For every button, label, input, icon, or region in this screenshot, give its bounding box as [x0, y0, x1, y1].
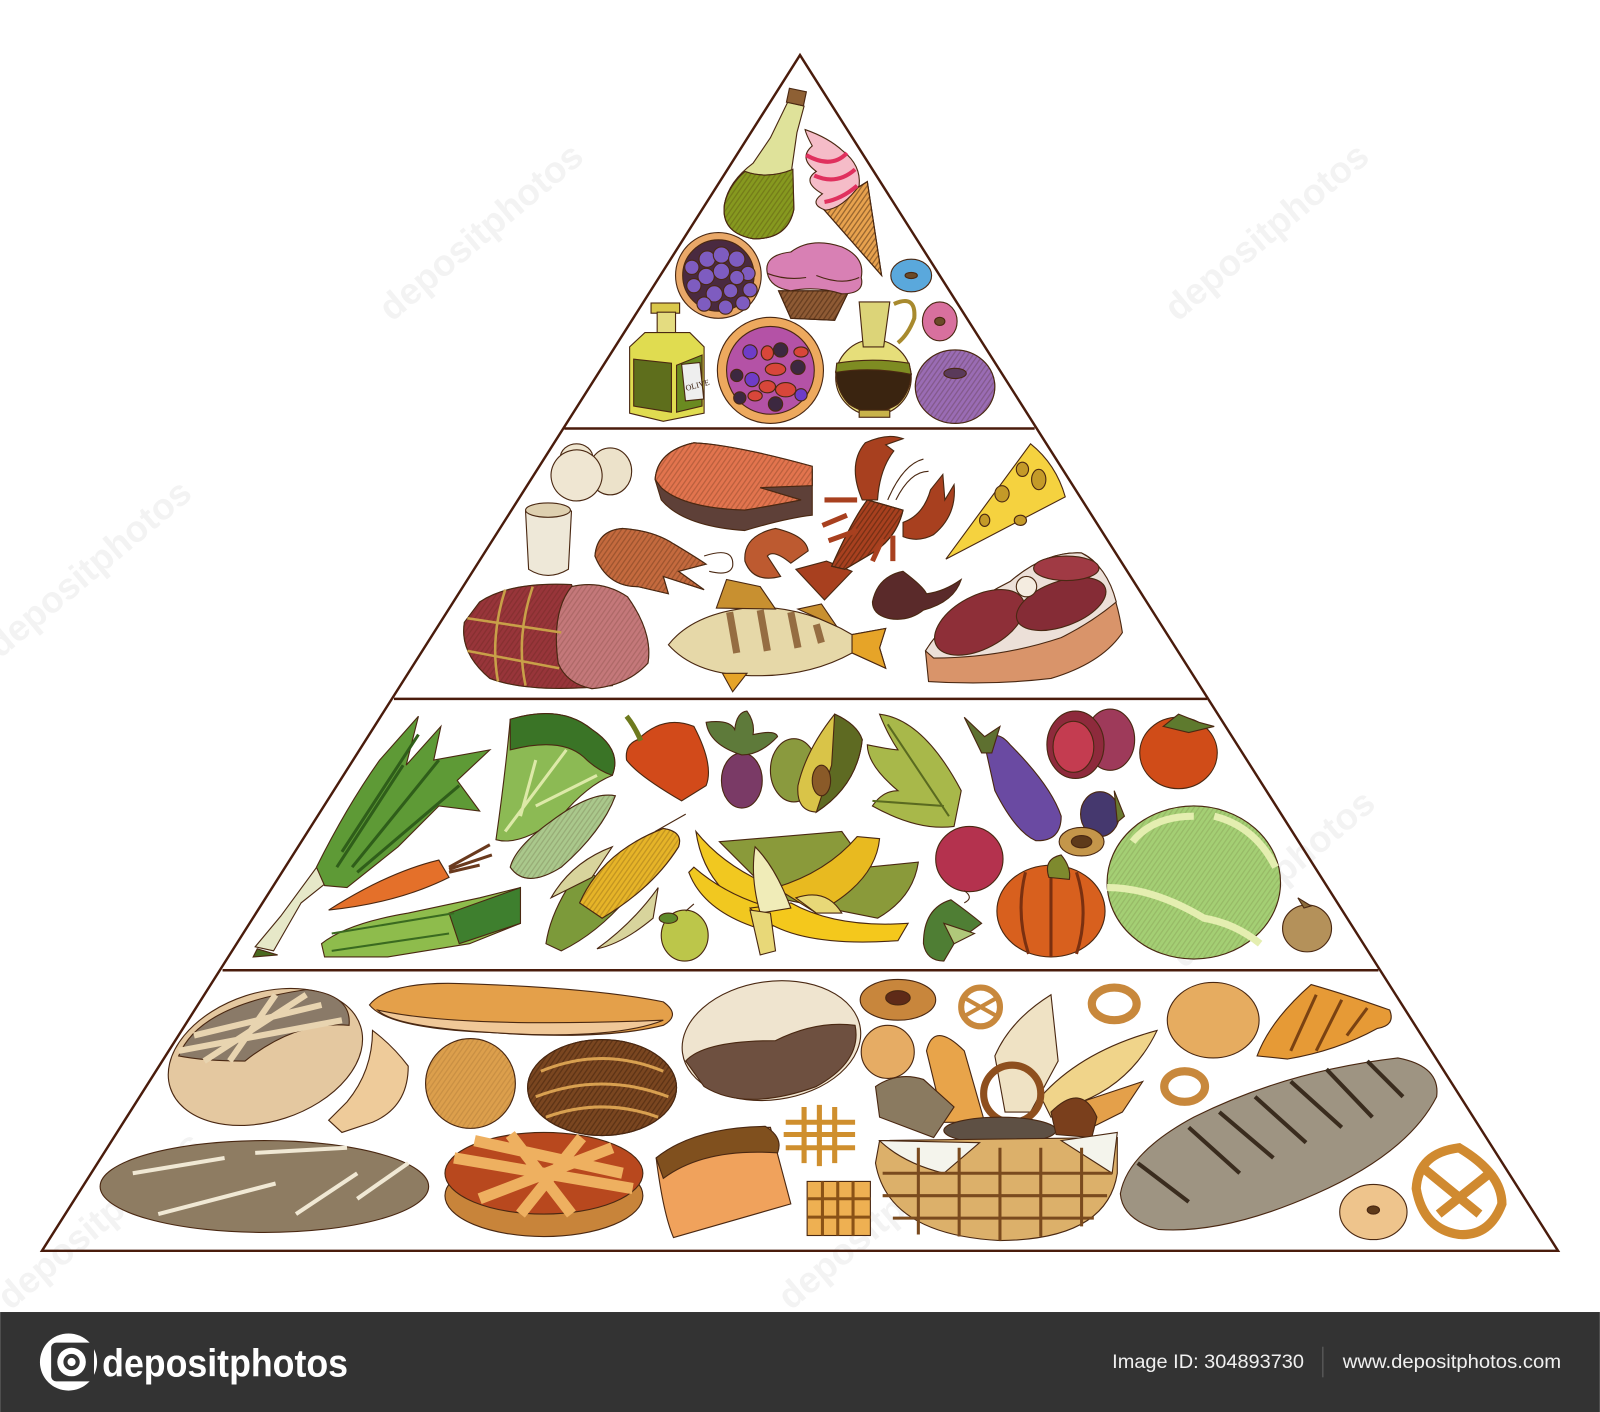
salmon steak — [655, 443, 812, 531]
large pretzel — [1416, 1148, 1502, 1235]
footer divider — [1322, 1347, 1323, 1377]
olive label: OLIVE — [685, 378, 711, 393]
second tier: protein — [464, 436, 1122, 692]
third tier: vegetables and fruit — [253, 709, 1332, 961]
zucchini — [510, 795, 615, 878]
carrot — [329, 845, 492, 910]
lattice pie — [445, 1132, 643, 1237]
small meat piece — [872, 571, 961, 619]
decorated sourdough loaf — [674, 970, 869, 1112]
eggs — [545, 444, 632, 507]
leek — [253, 716, 490, 957]
baguette — [369, 983, 672, 1035]
crescent pastry — [329, 1030, 408, 1132]
purple bundt cake — [915, 350, 995, 423]
celery — [322, 888, 520, 957]
green cabbage — [1107, 806, 1281, 959]
depositphotos logo icon — [40, 1333, 97, 1391]
watermark text: depositphotos — [371, 135, 591, 329]
blue donut — [891, 259, 932, 292]
ham roast — [464, 584, 649, 689]
lettuce — [496, 714, 615, 841]
long rye loaf — [1120, 1058, 1437, 1230]
lobster — [796, 436, 954, 600]
pink muffin — [767, 243, 862, 320]
green apple — [659, 904, 708, 961]
square olive oil bottle — [630, 303, 704, 421]
green oil bottle — [724, 88, 806, 239]
watermark text: depositphotos — [1156, 135, 1376, 329]
perch fish — [668, 579, 886, 692]
waffle square — [807, 1181, 870, 1236]
braided challah — [528, 1040, 677, 1136]
onion — [1283, 898, 1332, 952]
pile of bananas — [689, 831, 918, 955]
pomegranate — [1047, 709, 1135, 778]
ice cream cone — [805, 130, 882, 275]
beet — [706, 711, 778, 808]
ring roll top — [1092, 988, 1137, 1020]
berry pizza — [717, 317, 823, 423]
image id: Image ID: 304893730 — [1112, 1351, 1304, 1373]
watermark text — [0, 135, 1383, 1317]
waffle small cross — [784, 1105, 855, 1166]
biscuit — [861, 1025, 914, 1078]
beef steak — [924, 553, 1122, 683]
small pretzel — [961, 988, 1000, 1026]
croissant — [1257, 985, 1391, 1059]
eggplant — [964, 717, 1061, 841]
footer bar — [0, 1312, 1600, 1412]
pumpkin — [997, 855, 1105, 957]
bread basket — [875, 995, 1157, 1241]
bottom tier: bread and grains — [100, 965, 1502, 1241]
avocado — [770, 714, 862, 812]
bagel — [1340, 1184, 1407, 1240]
ring roll middle — [1164, 1071, 1205, 1102]
tomato — [1140, 714, 1217, 789]
small shrimp — [745, 528, 808, 578]
watermark text: depositphotos — [1162, 781, 1383, 975]
olive oil jug — [836, 301, 914, 417]
depositphotos wordmark: depositphotos — [102, 1342, 348, 1385]
pink donut — [922, 302, 957, 341]
top tier: oils and sweets — [630, 88, 995, 423]
jam cookie — [860, 979, 936, 1020]
oval dark loaf — [100, 1141, 429, 1232]
blueberry tart — [676, 233, 761, 318]
radish — [936, 826, 1003, 903]
website url: www.depositphotos.com — [1342, 1351, 1561, 1373]
beet greens — [867, 714, 961, 827]
cheese wedge — [946, 444, 1065, 559]
corn — [546, 814, 686, 951]
chocolate chip cookie — [426, 1039, 515, 1128]
watermark text: depositphotos — [770, 1123, 990, 1317]
plum — [1059, 791, 1124, 856]
sliced bread loaf — [656, 1126, 791, 1238]
sesame bun — [1167, 982, 1259, 1058]
broccoli — [923, 900, 982, 961]
large shrimp — [595, 528, 733, 594]
red bell pepper — [626, 716, 708, 801]
glass of milk — [526, 503, 571, 575]
scored round loaf — [150, 965, 380, 1149]
